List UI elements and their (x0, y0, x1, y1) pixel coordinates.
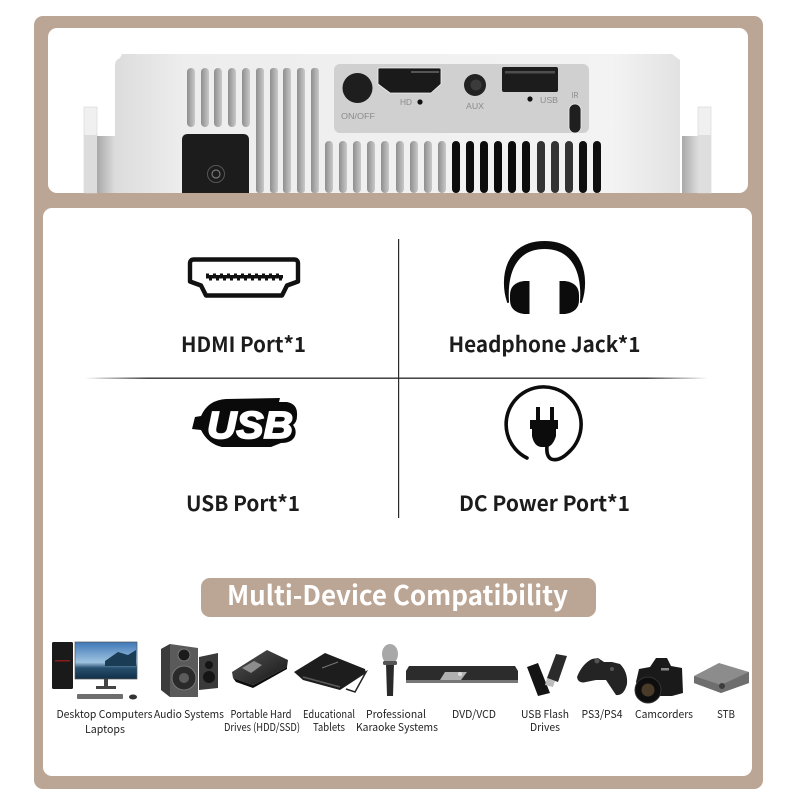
device: speakers (161, 644, 218, 697)
device: game controller (577, 658, 627, 695)
bottom vents (325, 141, 601, 193)
label: USB: USB Port*1 (186, 488, 300, 518)
captions: Tablets (313, 719, 345, 735)
port panel: USB (540, 95, 558, 105)
icon: USB (192, 398, 297, 447)
icon: headphones (505, 242, 584, 314)
port panel: AUX (466, 101, 484, 111)
captions: USB Flash (521, 706, 569, 722)
label: HDMI: HDMI Port*1 (181, 329, 306, 359)
captions: Drives (530, 719, 560, 735)
power socket (182, 134, 249, 193)
compatibility heading: Multi-Device Compatibility (227, 574, 568, 613)
icon: power plug (506, 387, 581, 460)
captions: Educational (303, 706, 355, 722)
captions (56, 706, 735, 737)
panel: ports and compatibility (43, 208, 752, 776)
projector stands (84, 107, 711, 193)
captions: DVD/VCD (452, 706, 496, 722)
captions: Professional (366, 706, 426, 722)
label: DC power: DC Power Port*1 (459, 488, 630, 518)
device: portable hard drive (232, 650, 288, 688)
captions: Portable Hard (230, 706, 292, 722)
device: DVD player (406, 666, 518, 683)
port panel: IR (572, 90, 578, 100)
icon: HDMI (190, 260, 298, 296)
label: headphone: Headphone Jack*1 (448, 329, 640, 359)
device: USB flash drives (527, 654, 567, 696)
captions: Camcorders (635, 706, 693, 722)
device: set-top box (694, 663, 749, 693)
device: educational tablet (294, 653, 366, 692)
port panel (334, 64, 589, 133)
captions: Laptops (85, 721, 125, 737)
port panel: HD (400, 97, 412, 107)
top vents (187, 68, 319, 193)
panel: projector rear view (48, 28, 748, 193)
projector body (115, 54, 680, 193)
port panel: ON/OFF (341, 111, 375, 121)
captions: Drives (HDD/SSD) (224, 719, 300, 735)
device: desktop computer (52, 642, 137, 700)
icon: USB: USB (207, 405, 293, 447)
captions: Desktop Computers (56, 706, 152, 722)
captions: Karaoke Systems (356, 719, 438, 735)
captions: PS3/PS4 (582, 706, 622, 722)
captions: Audio Systems (154, 706, 224, 722)
device: camera (635, 658, 683, 703)
captions: STB (717, 706, 735, 722)
device: microphone (382, 644, 398, 696)
